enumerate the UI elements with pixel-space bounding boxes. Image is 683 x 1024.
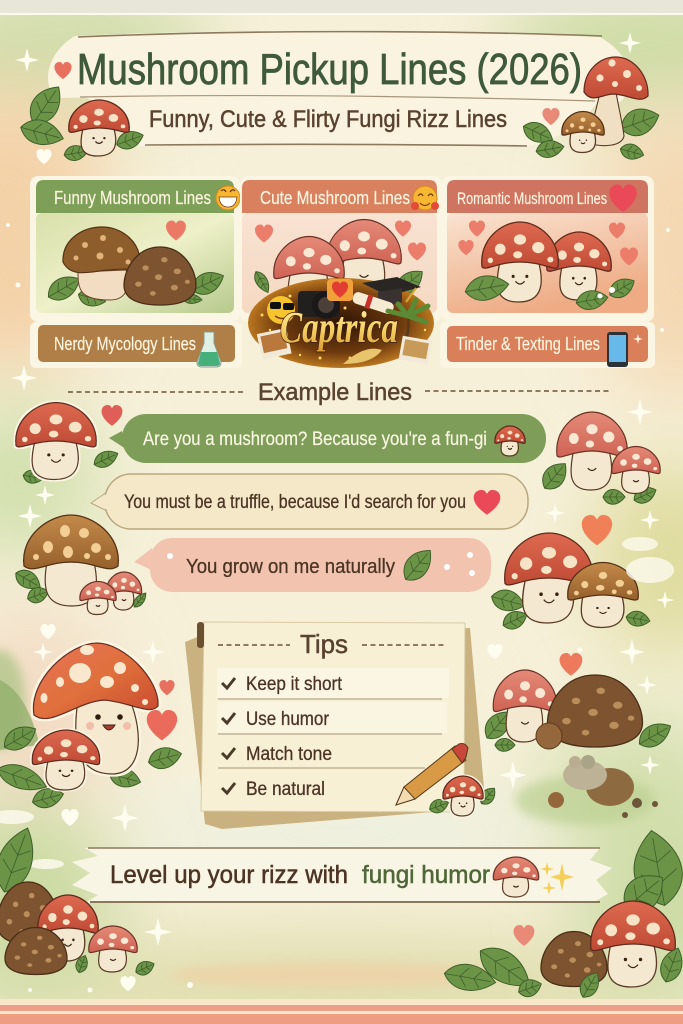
example bubble: cream: You must be a truffle, because I'd search for you (124, 492, 466, 513)
icon: heart (474, 490, 500, 515)
illustration: brown mushroom and truffle (43, 220, 228, 309)
illustration: cute red mushrooms (251, 220, 428, 310)
tip: match tone: Match tone (246, 744, 332, 765)
label bar: tinder and texting lines (440, 322, 655, 368)
tip: keep it short (217, 668, 449, 698)
mushrooms: red pair right (537, 412, 660, 507)
banner: level up: fungi humor (362, 861, 490, 889)
tip: use humor (217, 702, 447, 733)
decoration: side clouds (0, 810, 64, 869)
icon: palm tree (388, 300, 428, 350)
icon: feather (343, 349, 382, 364)
decoration: title right mushrooms and leaves (520, 57, 663, 162)
mushrooms: bottom right group (442, 827, 683, 1001)
banner: level up (72, 848, 612, 903)
icon: left photo (257, 328, 292, 360)
icon: yellow sparkles (540, 862, 574, 895)
icon: diploma (351, 290, 395, 316)
top strip (0, 0, 683, 15)
icon: mushroom (495, 426, 525, 456)
mushrooms: large red left group (0, 643, 184, 811)
icon: graduation cap (362, 277, 421, 305)
icon: blushing emoji (411, 186, 439, 210)
bottom stripes (0, 999, 683, 1024)
icon: camera (298, 291, 340, 319)
mushrooms: red and truffle right group (479, 653, 676, 753)
icon: leaf (397, 543, 438, 586)
panel: cute mushroom lines (240, 176, 442, 322)
mushrooms: brown left group (12, 515, 149, 614)
example bubble: green (109, 414, 546, 463)
example bubble: pink: You grow on me naturally (186, 556, 395, 578)
heading: tips: Tips (300, 629, 348, 659)
icon: sunglasses emoji (267, 296, 295, 324)
icon: heart (54, 62, 72, 79)
decoration: title left mushroom and leaves (18, 79, 146, 162)
title banner (48, 31, 630, 146)
label: Cute Mushroom Lines (260, 188, 410, 208)
logo: Captrica (248, 277, 434, 368)
icon: mushroom (493, 857, 539, 897)
large red mushroom (33, 643, 158, 774)
heading: example lines: Example Lines (258, 379, 412, 406)
icon: pencil (396, 744, 468, 805)
icon: small mushroom (427, 776, 499, 816)
mushroom: red left, first bubble (16, 402, 122, 485)
example bubble: cream (91, 474, 528, 529)
tip: use humor: Use humor (246, 709, 330, 730)
tip: keep it short: Keep it short (246, 674, 343, 695)
example bubble: pink (134, 538, 491, 592)
mushrooms: red and brown right group (489, 515, 651, 633)
label bar: nerdy mycology lines (30, 322, 242, 368)
illustration: romantic red mushrooms (458, 220, 638, 312)
clouds right (622, 537, 674, 583)
icon: red heart (609, 184, 637, 212)
tip: be natural: Be natural (246, 779, 325, 800)
label bar: nerdy mycology lines: Nerdy Mycology Lines (54, 334, 196, 354)
heading: title: Mushroom Pickup Lines (2026) (77, 45, 582, 94)
icon: heart speech badge (327, 279, 353, 301)
truffle clump right (548, 755, 658, 818)
panel: funny mushroom lines (30, 176, 242, 368)
heading: subtitle: Funny, Cute & Flirty Fungi Rizz Lines (149, 106, 507, 133)
panel: romantic mushroom lines (440, 176, 655, 368)
logo wordmark: Captrica (280, 303, 398, 352)
icon: right photo (399, 336, 432, 365)
mushrooms: bottom left group (0, 822, 157, 978)
label: Romantic Mushroom Lines (457, 190, 607, 208)
icon: laughing emoji (216, 186, 240, 210)
label: Funny Mushroom Lines (54, 188, 211, 208)
label bar: tinder and texting lines: Tinder & Texting Lines (456, 334, 600, 354)
example bubble: green: Are you a mushroom? Because you're a fun-gi (143, 429, 487, 450)
panel: tips note (185, 622, 499, 829)
banner: level up: Level up your rizz with (110, 861, 348, 889)
